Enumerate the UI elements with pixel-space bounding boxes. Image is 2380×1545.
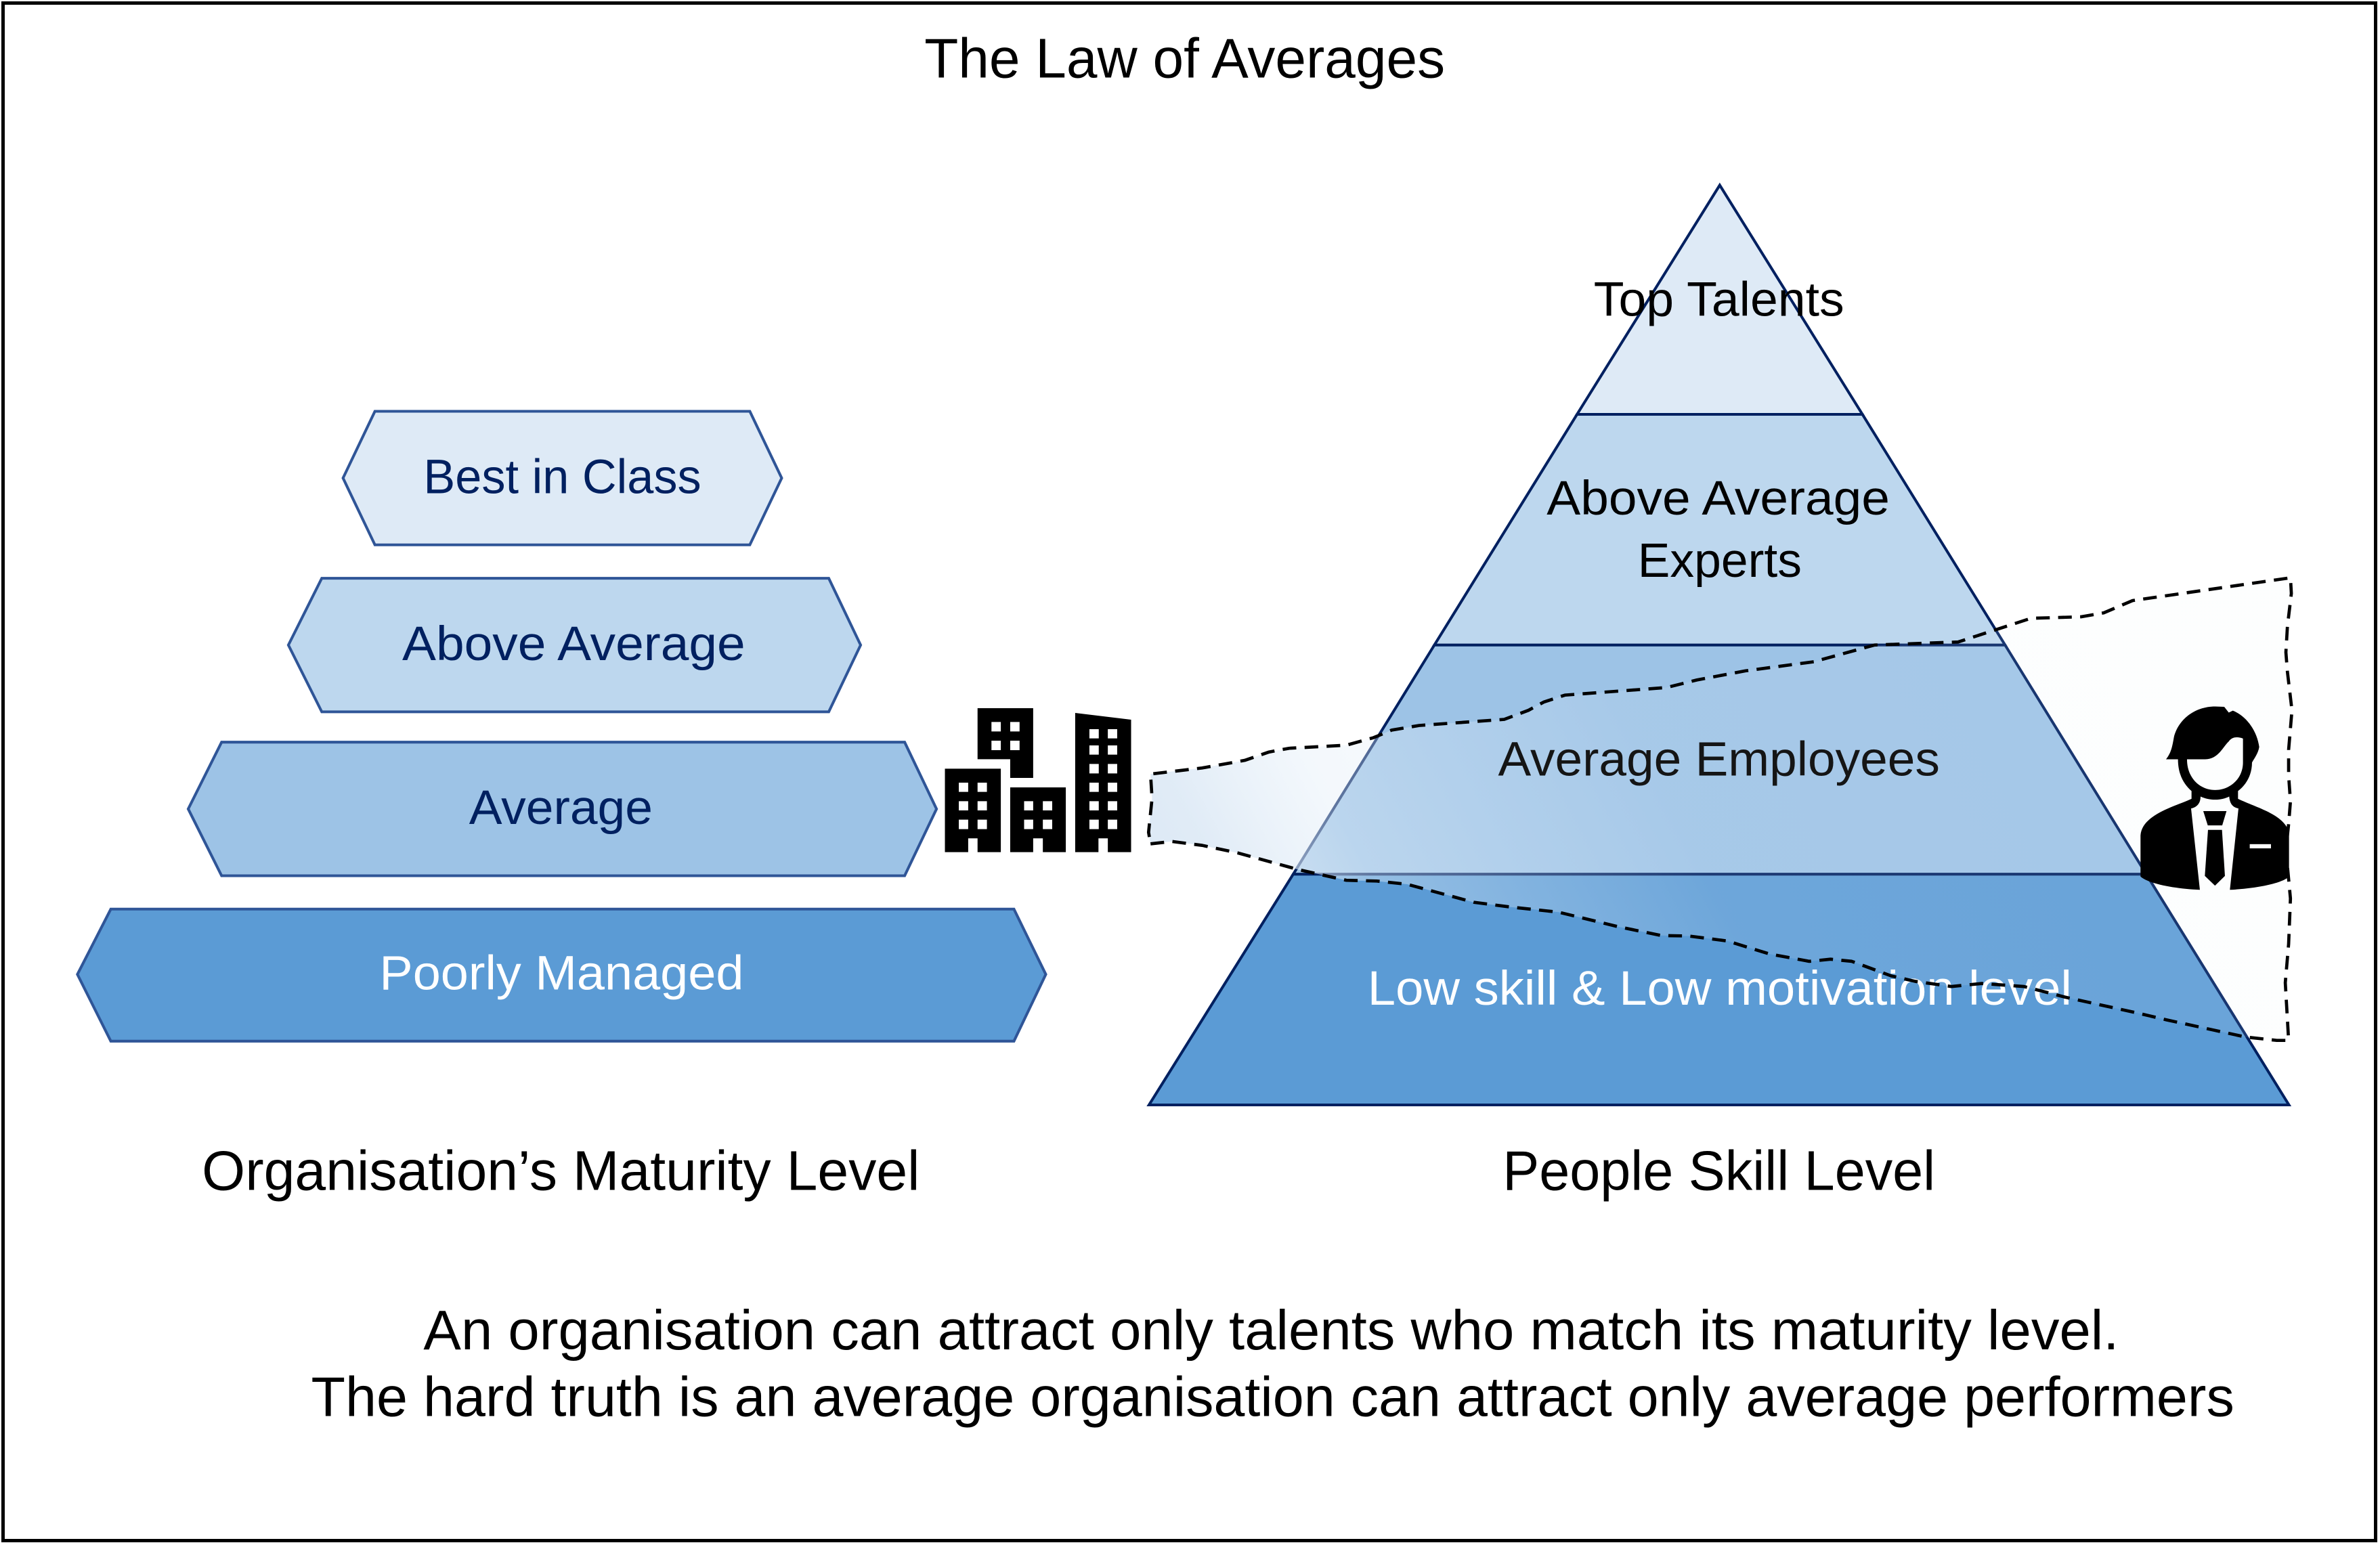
level: above average: Above Average	[402, 617, 745, 671]
label: experts: Experts	[1638, 534, 1802, 588]
conclusion line 1: An organisation can attract only talents who match its maturity level.	[423, 1299, 2119, 1362]
tier: top talents	[1577, 185, 1863, 414]
title: The Law of Averages	[924, 26, 1445, 89]
conclusion text	[311, 1299, 2234, 1429]
level: average	[188, 742, 936, 875]
panel: people skill pyramid	[1149, 185, 2289, 1105]
level: average: Average	[469, 781, 653, 835]
level: above average	[288, 578, 861, 712]
axis label: people skill: People Skill Level	[1502, 1139, 1935, 1202]
label: top talents: Top Talents	[1594, 272, 1844, 326]
level: poorly managed: Poorly Managed	[379, 946, 743, 1001]
axis label: organisation maturity: Organisation’s Maturity Level	[202, 1139, 919, 1202]
tier: average employees	[1293, 645, 2146, 874]
funnel highlight	[1148, 578, 2292, 1041]
label: average employees: Average Employees	[1498, 733, 1940, 787]
level: poorly managed	[77, 909, 1046, 1041]
conclusion line 2: The hard truth is an average organisation can attract only average performers	[311, 1366, 2234, 1429]
icon: office buildings	[945, 708, 1131, 852]
level: best in class: Best in Class	[423, 450, 701, 504]
tier: low skill	[1149, 874, 2289, 1105]
level: best in class	[343, 412, 781, 545]
dashed funnel outline	[1148, 578, 2292, 1041]
tier: above average experts	[1434, 414, 2005, 645]
label: above average: Above Average	[1546, 471, 1890, 525]
panel: organisation maturity levels	[77, 412, 1046, 1041]
icon: business person	[2140, 706, 2289, 890]
pyramid labels	[1368, 272, 2072, 1016]
label: low skill: Low skill & Low motivation level	[1368, 961, 2072, 1016]
